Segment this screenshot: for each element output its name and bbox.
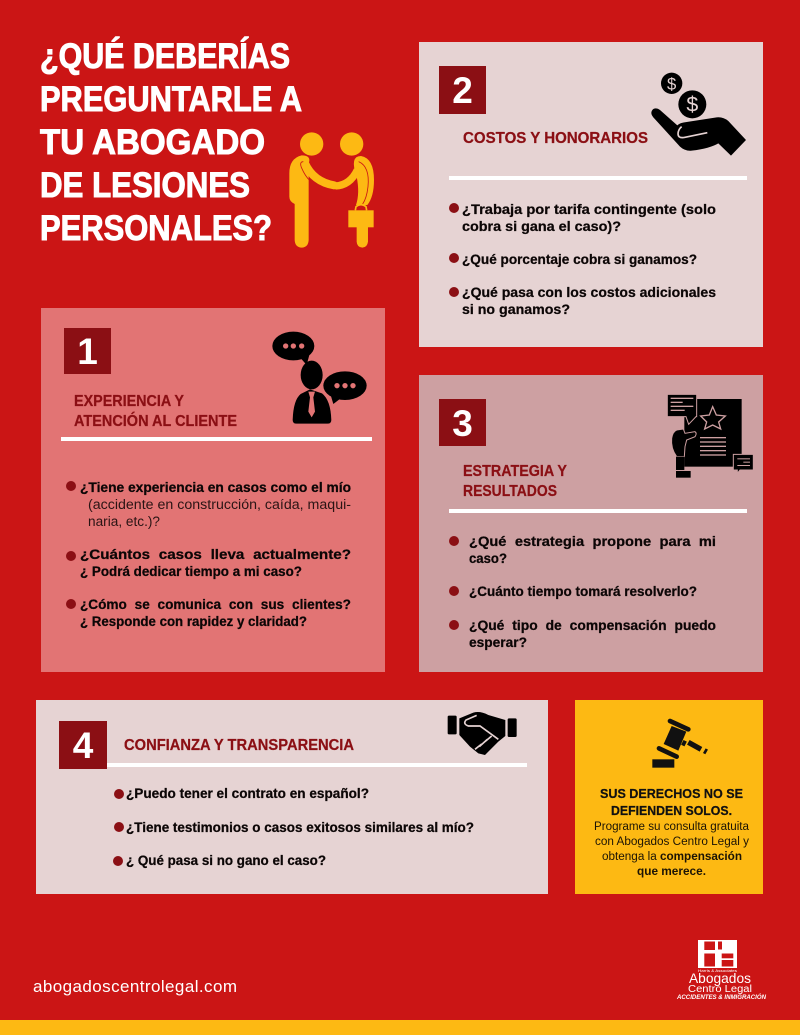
number 1 (64, 328, 111, 374)
heading: experiencia: ATENCIÓN AL CLIENTE (74, 412, 237, 430)
questions: ¿ Responde con rapidez y claridad? (80, 614, 307, 629)
logo (676, 940, 767, 1001)
title (40, 36, 302, 248)
logo: Harris & Associates (698, 968, 737, 973)
number 1: 1 (77, 331, 98, 372)
icon: person with speech bubbles (272, 332, 367, 424)
panel 2: costos y honorarios (419, 42, 763, 347)
questions: ¿ Qué pasa si no gano el caso? (126, 853, 326, 868)
logo: Abogados (689, 970, 751, 986)
call to action text: DEFIENDEN SOLOS. (611, 803, 732, 818)
heading: confianza: CONFIANZA Y TRANSPARENCIA (124, 737, 354, 754)
questions: cobra si gana el caso)? (462, 219, 621, 234)
call to action text: con Abogados Centro Legal y (595, 836, 749, 848)
footer bar (0, 1020, 800, 1035)
questions: ¿Qué tipo de compensación puedo (469, 618, 716, 633)
questions: ¿Cómo se comunica con sus clientes? (80, 597, 351, 612)
icon: two people shaking hands (289, 132, 374, 248)
questions (449, 534, 716, 650)
title: TU ABOGADO (40, 123, 265, 162)
call to action text: SUS DERECHOS NO SE (600, 786, 743, 801)
questions: caso? (469, 551, 507, 566)
title: PERSONALES? (40, 209, 272, 248)
questions: ¿ Podrá dedicar tiempo a mi caso? (80, 564, 302, 579)
heading: experiencia (74, 393, 237, 430)
questions: ¿Tiene experiencia en casos como el mío (80, 480, 351, 495)
number 4 (59, 721, 107, 769)
questions: ¿Cuántos casos lleva actualmente? (80, 547, 351, 562)
heading: experiencia: EXPERIENCIA Y (74, 393, 185, 410)
questions: ¿Tiene testimonios o casos exitosos similares al mío? (126, 820, 474, 835)
call to action text: Programe su consulta gratuita (594, 821, 750, 833)
logo mark (698, 940, 737, 968)
icon: hand with coins: $ (667, 74, 676, 93)
panel 3: estrategia y resultados (419, 375, 763, 672)
website url: abogadoscentrolegal.com (33, 977, 237, 996)
questions: ¿Qué estrategia propone para mi (469, 534, 716, 549)
number 3 (439, 399, 486, 446)
heading: estrategia: RESULTADOS (463, 483, 557, 500)
questions: esperar? (469, 635, 527, 650)
call to action text (594, 786, 750, 878)
icon: handshake (448, 712, 517, 755)
questions: ¿Cuánto tiempo tomará resolverlo? (469, 584, 697, 599)
icon: hand with coins (651, 73, 746, 156)
panel 1: experiencia y atención al cliente (41, 308, 385, 672)
call to action text: obtenga la compensación (602, 851, 742, 863)
icon: document with star and speech bubbles (667, 394, 753, 478)
questions: naria, etc.)? (88, 514, 160, 529)
questions (449, 202, 716, 317)
title: DE LESIONES (40, 166, 250, 205)
questions: (accidente en construcción, caída, maqui- (88, 497, 351, 512)
number 3: 3 (452, 403, 473, 444)
questions: ¿Qué porcentaje cobra si ganamos? (462, 252, 697, 267)
questions: si no ganamos? (462, 302, 570, 317)
number 4: 4 (73, 725, 94, 766)
number 2 (439, 66, 486, 114)
icon: gavel (652, 721, 707, 768)
panel 4: confianza y transparencia (36, 700, 548, 894)
questions (113, 786, 474, 868)
heading: estrategia: ESTRATEGIA Y (463, 463, 568, 480)
questions (66, 480, 351, 629)
logo: Centro Legal (688, 984, 752, 995)
questions: ¿Qué pasa con los costos adicionales (462, 285, 716, 300)
heading: estrategia (463, 463, 568, 500)
number 2: 2 (452, 70, 473, 111)
icon: hand with coins: $ (686, 93, 698, 117)
title: PREGUNTARLE A (40, 80, 302, 119)
call to action text: que merece. (637, 866, 706, 878)
questions: ¿Puedo tener el contrato en español? (126, 786, 369, 801)
title: ¿QUÉ DEBERÍAS (40, 36, 290, 76)
panel: call to action (575, 700, 763, 894)
questions: ¿Trabaja por tarifa contingente (solo (462, 202, 716, 217)
logo: ACCIDENTES & INMIGRACIÓN (676, 994, 767, 1001)
heading: costos y honorarios: COSTOS Y HONORARIOS (463, 130, 648, 147)
